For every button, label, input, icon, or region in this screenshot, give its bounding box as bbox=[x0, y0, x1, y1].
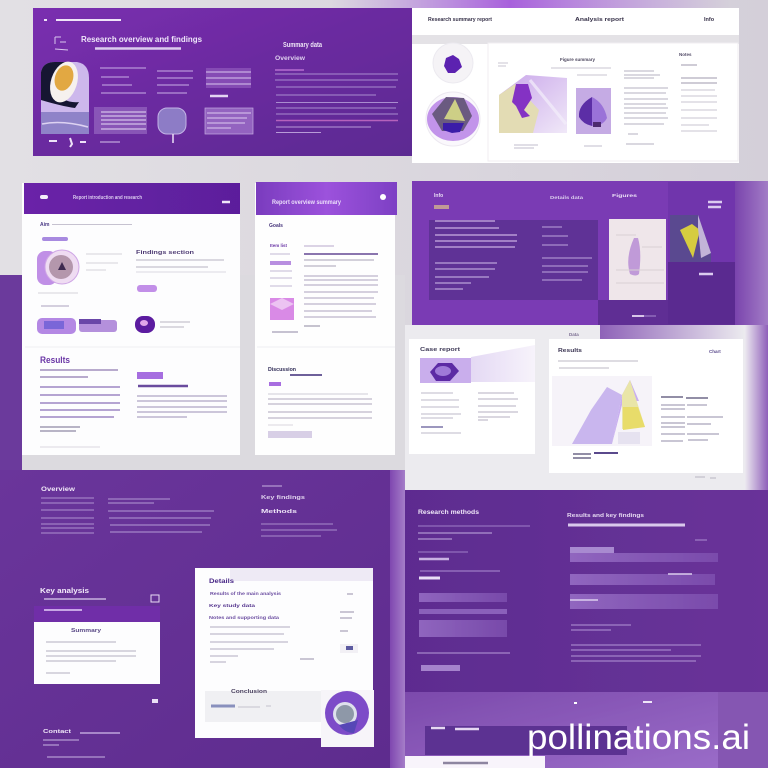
heading: Info bbox=[434, 193, 443, 199]
progress bar bbox=[632, 315, 644, 317]
image: pink card bbox=[270, 298, 294, 320]
text block bbox=[435, 221, 517, 247]
image: crystal bbox=[670, 215, 711, 262]
heading: Chart bbox=[709, 349, 721, 354]
chart: chips row bbox=[37, 318, 117, 334]
text block bbox=[421, 393, 461, 418]
text block bbox=[275, 69, 304, 71]
footer text bbox=[43, 729, 120, 757]
illustration: lilac shape bbox=[37, 237, 79, 285]
side marks bbox=[300, 594, 358, 659]
heading: Research methods bbox=[418, 510, 480, 516]
panel: figure area bbox=[488, 43, 738, 161]
label: small tab: Data bbox=[569, 332, 579, 337]
side notes bbox=[679, 52, 717, 131]
icon: small box bbox=[151, 595, 159, 602]
paper card bbox=[609, 219, 666, 300]
subheading bbox=[40, 222, 132, 228]
icon row bbox=[49, 138, 86, 147]
heading: right text block: Overview bbox=[275, 55, 306, 62]
heading: Details bbox=[209, 579, 235, 585]
notes: Key findings bbox=[261, 495, 305, 501]
heading bbox=[40, 588, 106, 610]
icon: crystal in circle bbox=[426, 92, 480, 146]
text block bbox=[46, 642, 136, 673]
heading: lower bbox=[268, 367, 322, 386]
heading: Results and key findings bbox=[567, 513, 644, 519]
heading: lower section: Results bbox=[40, 355, 70, 365]
text block bbox=[41, 498, 94, 533]
watermark: pollinations.ai bbox=[527, 717, 750, 757]
panel: white page with purple header, left bbox=[22, 183, 240, 455]
heading: report title bbox=[81, 34, 202, 48]
caption bbox=[573, 453, 618, 458]
table card three bbox=[205, 108, 253, 134]
badge: lilac chip bbox=[137, 285, 157, 292]
heading: Details data bbox=[550, 195, 584, 200]
heading: report title: Research overview and findings bbox=[81, 34, 202, 44]
heading: top bar: Analysis report bbox=[575, 17, 624, 23]
subheading: Aim bbox=[40, 222, 50, 228]
heading: top bar: Info bbox=[704, 17, 715, 23]
small caption bbox=[41, 305, 69, 307]
text block lower bbox=[268, 393, 368, 395]
heading: section: Findings section bbox=[136, 250, 195, 256]
text columns bbox=[100, 68, 193, 93]
table card bbox=[206, 68, 251, 96]
panel: white card on purple bbox=[34, 588, 160, 757]
right column bbox=[570, 540, 718, 661]
text block left bbox=[40, 370, 118, 377]
notes bbox=[261, 486, 337, 536]
heading: lower section: Conclusion bbox=[231, 689, 267, 695]
panel: light page with gem bbox=[409, 339, 535, 454]
left column bbox=[417, 526, 530, 671]
chart: half gem card bbox=[576, 88, 611, 134]
subheading: Goals bbox=[269, 223, 283, 229]
heading: Results bbox=[558, 348, 582, 354]
text block bbox=[661, 397, 708, 398]
heading: top bar: Research summary report bbox=[428, 17, 492, 23]
panel: white page with purple header, center: Item list bbox=[270, 243, 288, 248]
heading: card: Summary bbox=[71, 628, 101, 634]
label chip bbox=[434, 205, 449, 209]
panel: bottom-left purple text section bbox=[41, 486, 337, 536]
footer band text bbox=[431, 701, 652, 763]
panel: white document bbox=[195, 568, 373, 738]
side notes: Notes bbox=[679, 52, 692, 57]
heading: Case report bbox=[420, 347, 460, 353]
heading: Overview bbox=[41, 487, 75, 493]
panel: white dashboard bbox=[412, 8, 739, 163]
side chips bbox=[699, 202, 722, 274]
table card two bbox=[94, 107, 147, 134]
chart: crystal sheet bbox=[499, 75, 567, 133]
list rows bbox=[209, 591, 282, 620]
list rows: Results of the main analysis bbox=[210, 591, 282, 596]
text block bbox=[304, 245, 334, 247]
grey strip bbox=[205, 691, 330, 722]
small label bbox=[152, 699, 158, 703]
heading: Key analysis bbox=[40, 588, 89, 595]
heading: right text block: Summary data bbox=[283, 42, 322, 49]
icon: purple gem circle bbox=[433, 43, 473, 83]
image: shell illustration bbox=[41, 58, 89, 134]
panel: purple header report bbox=[33, 8, 413, 156]
icon: diagram bbox=[158, 108, 186, 134]
panel: light page with fan chart bbox=[549, 339, 743, 478]
list rows: Notes and supporting data bbox=[209, 615, 280, 620]
list rows: Key study data bbox=[209, 603, 256, 608]
footer text: Contact bbox=[43, 729, 71, 735]
chart: fan area bbox=[572, 380, 645, 444]
icon: purple stone bbox=[135, 316, 155, 333]
heading: right text block bbox=[275, 42, 322, 62]
image: gem bbox=[420, 358, 471, 383]
icon: dot bbox=[380, 194, 386, 200]
panel: figure area: Figure summary bbox=[560, 57, 595, 62]
heading: Figures bbox=[612, 193, 638, 198]
header tag text bbox=[222, 201, 230, 203]
heading bbox=[418, 510, 685, 525]
heading bbox=[434, 193, 638, 200]
notes: Methods bbox=[261, 509, 297, 515]
heading: top bar bbox=[428, 17, 715, 23]
icon: header tag bbox=[40, 195, 48, 199]
panel: bottom-right purple page bbox=[390, 470, 768, 768]
panel: purple page, right bbox=[412, 181, 735, 325]
icon: ring card bbox=[321, 690, 374, 747]
heading: right lower bbox=[137, 372, 188, 386]
icon: small outline bbox=[55, 37, 68, 50]
heading bbox=[558, 348, 721, 368]
heading: Report overview summary bbox=[272, 199, 341, 206]
text block bbox=[210, 627, 290, 662]
heading: Report introduction and research bbox=[73, 195, 142, 201]
heading: lower: Discussion bbox=[268, 367, 296, 373]
text column bbox=[624, 71, 668, 144]
text block right bbox=[137, 396, 227, 417]
panel: white page with purple header, center bbox=[255, 182, 397, 455]
labels: lilac chips bbox=[270, 261, 291, 265]
